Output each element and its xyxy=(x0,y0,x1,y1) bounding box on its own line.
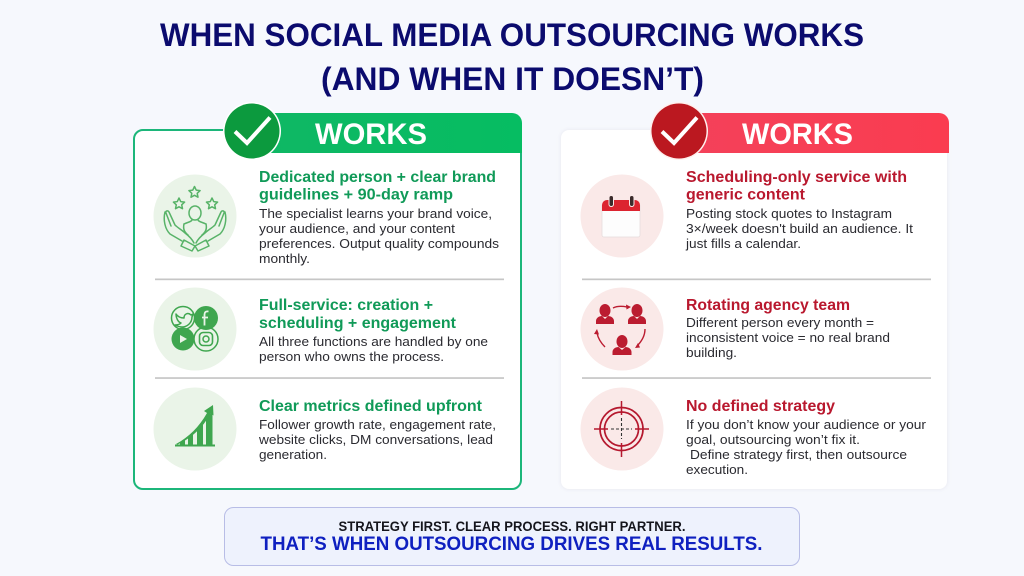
text: full-service xyxy=(259,297,488,364)
text: no defined strategy: Define strategy first, then outsource xyxy=(690,448,907,462)
callout: closing message: THAT’S WHEN OUTSOURCING DRIVES REAL RESULTS. xyxy=(260,533,762,555)
text: rotating agency team: Different person every month = xyxy=(686,316,874,330)
text: scheduling-only: Posting stock quotes to Instagram xyxy=(686,207,892,221)
heading: works: WORKS xyxy=(315,118,427,151)
panel border xyxy=(134,130,521,489)
text: clear metrics: generation. xyxy=(259,448,327,462)
text: full-service: All three functions are handled by one xyxy=(259,335,488,349)
text: clear metrics: Clear metrics defined upfront xyxy=(259,398,482,415)
text: full-service: scheduling + engagement xyxy=(259,315,456,332)
text: dedicated person: your audience, and your content xyxy=(259,222,456,236)
callout: closing message xyxy=(224,508,800,566)
icon: check badge xyxy=(650,102,708,160)
text: dedicated person: preferences. Output quality compounds xyxy=(259,237,499,251)
text: full-service: person who owns the process. xyxy=(259,350,444,364)
text: scheduling-only: 3×/week doesn't build an audience. It xyxy=(686,222,914,236)
icon: social media xyxy=(154,288,236,370)
text: no defined strategy: No defined strategy xyxy=(686,398,835,415)
text: clear metrics: Follower growth rate, engagement rate, xyxy=(259,418,496,432)
panel background xyxy=(561,130,947,489)
text: no defined strategy xyxy=(686,398,926,477)
heading: works: WORKS xyxy=(742,118,853,151)
text: scheduling-only: just fills a calendar. xyxy=(685,237,801,251)
header banner xyxy=(690,113,949,153)
text: dedicated person: The specialist learns your brand voice, xyxy=(259,207,492,221)
text: rotating agency team: building. xyxy=(686,346,737,360)
text: rotating agency team: inconsistent voice = no real brand xyxy=(686,331,890,345)
text: dedicated person: monthly. xyxy=(259,252,310,266)
icon: check badge xyxy=(223,102,281,160)
text: dedicated person: guidelines + 90-day ramp xyxy=(259,186,453,204)
icon: person with stars and hands xyxy=(154,174,236,258)
panel: works xyxy=(134,102,522,489)
title: (AND WHEN IT DOESN’T) xyxy=(321,61,704,97)
text: no defined strategy: execution. xyxy=(686,463,748,477)
callout: closing message: STRATEGY FIRST. CLEAR PROCESS. RIGHT PARTNER. xyxy=(338,519,686,534)
icon: rotating team xyxy=(580,288,664,370)
text: scheduling-only: generic content xyxy=(686,186,805,204)
icon: target crosshair xyxy=(580,388,664,470)
icon: calendar xyxy=(580,174,664,258)
text: full-service: Full-service: creation + xyxy=(259,297,433,314)
text: rotating agency team: Rotating agency team xyxy=(686,297,850,314)
text: scheduling-only: Scheduling-only service with xyxy=(686,169,907,186)
icon: growth chart xyxy=(154,388,236,470)
text: dedicated person: Dedicated person + clear brand xyxy=(259,169,496,186)
text: clear metrics xyxy=(258,398,496,462)
text: scheduling-only xyxy=(685,169,914,251)
panel: does not work xyxy=(561,102,949,489)
text: clear metrics: website clicks, DM conversations, lead xyxy=(258,433,493,447)
header banner xyxy=(262,113,522,153)
text: no defined strategy: goal, outsourcing won’t fix it. xyxy=(686,433,860,447)
text: no defined strategy: If you don’t know your audience or your xyxy=(686,418,926,432)
text: dedicated person xyxy=(259,169,499,266)
title: WHEN SOCIAL MEDIA OUTSOURCING WORKS xyxy=(160,17,864,53)
text: rotating agency team xyxy=(686,297,890,360)
title xyxy=(160,17,864,97)
